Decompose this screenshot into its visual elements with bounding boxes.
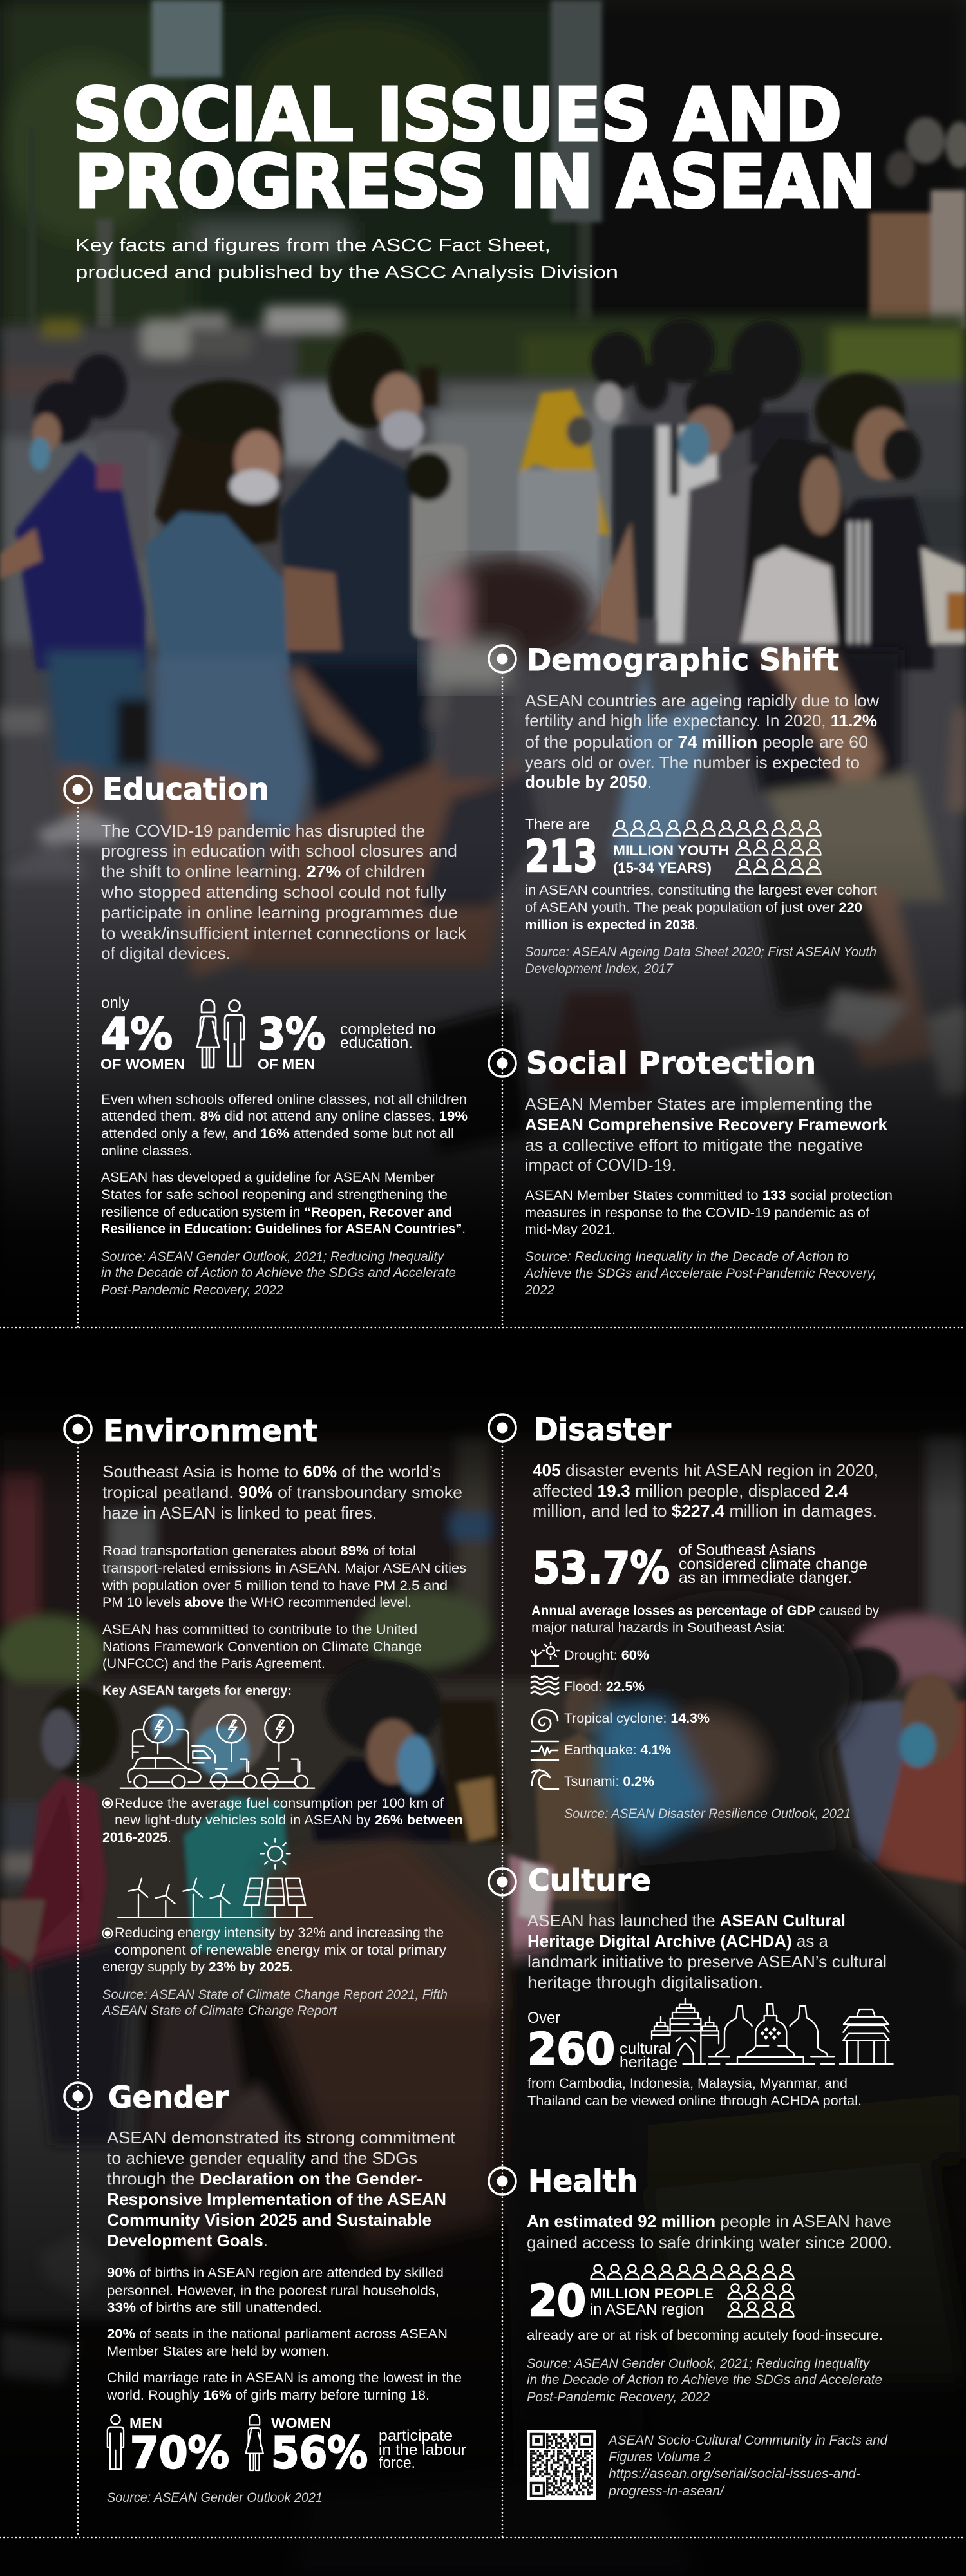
- bullet: fuel consumption: [102, 1795, 463, 1845]
- subheading: key targets: Key ASEAN targets for energy:: [102, 1683, 292, 1698]
- foreground blurred girl: [425, 557, 592, 689]
- statistic: labour force: participate: [379, 2427, 453, 2445]
- source: social protection: 2022: [524, 1283, 554, 1298]
- statistic: 53.7 percent: considered climate change: [679, 1555, 867, 1573]
- body text: ageing: fertility and high life expectancy. In 2020, 11.2%: [525, 711, 877, 730]
- icon: drought: [531, 1642, 559, 1666]
- body text: recovery framework: [525, 1094, 888, 1175]
- statistic: 213 million youth: (15-34 YEARS): [613, 860, 712, 876]
- body text: covid disruption: to weak/insufficient internet connections or lack: [101, 923, 467, 943]
- body text: road transport: PM 10 levels above the WHO recommended level.: [102, 1595, 412, 1610]
- statistic: 20 million people: [528, 2264, 793, 2327]
- source: health: in the Decade of Action to Achieve the SDGs and Accelerate: [527, 2372, 882, 2387]
- source: demographic: Development Index, 2017: [525, 961, 674, 976]
- section marker: disaster: [489, 1414, 516, 1441]
- source: environment: Source: ASEAN State of Climate Change Report 2021, Fifth: [102, 1987, 448, 2002]
- body text: disaster events: affected 19.3 million people, displaced 2.4: [533, 1481, 849, 1501]
- body text: gender declaration: [107, 2128, 456, 2250]
- statistic: labour force: in the labour: [379, 2441, 466, 2459]
- source: education: Source: ASEAN Gender Outlook, 2021; Reducing Inequality: [101, 1249, 444, 1264]
- body text: disaster events: [533, 1461, 878, 1520]
- section marker: environment: [64, 1416, 91, 1443]
- icon: renewable energy: [118, 1839, 312, 1917]
- statistic: labour force: 70%: [130, 2428, 229, 2479]
- source: health: [527, 2356, 882, 2405]
- statistic: completed no education: completed no: [340, 1021, 436, 1038]
- section marker: health: [489, 2168, 516, 2195]
- body text: ACHDA portal: [527, 2076, 862, 2108]
- body text: births: 33% of births are still unattended.: [107, 2300, 322, 2315]
- icon: heritage temples: [652, 1998, 893, 2064]
- label: drought: Drought: 60%: [564, 1647, 649, 1663]
- statistic: labour force: 56%: [271, 2428, 368, 2479]
- body text: covid disruption: The COVID-19 pandemic has disrupted the: [101, 821, 425, 840]
- statistic: 260 cultural heritage: 260: [527, 2024, 615, 2075]
- source: environment: [101, 1987, 448, 2018]
- title: [73, 73, 876, 224]
- body text: parliament: [107, 2326, 448, 2359]
- lower street: [0, 650, 966, 1153]
- statistic: labour force: WOMEN: [271, 2415, 331, 2431]
- body text: covid disruption: [100, 821, 467, 963]
- source: demographic: Source: ASEAN Ageing Data Sheet 2020; First ASEAN Youth: [525, 945, 876, 960]
- icon: earthquake: [531, 1741, 558, 1760]
- statistic: 53.7 percent: [533, 1541, 867, 1594]
- statistic: labour force: force.: [379, 2454, 415, 2472]
- body text: road transport: [102, 1543, 466, 1610]
- boy in white: [412, 444, 467, 638]
- body text: road transport: Road transportation generates about 89% of total: [102, 1543, 416, 1558]
- body text: gender declaration: through the Declaration on the Gender-: [107, 2169, 422, 2188]
- statistic: 260 cultural heritage: [527, 2009, 677, 2075]
- panel: demographic shift: [489, 643, 879, 976]
- body text: UNFCCC: ASEAN has committed to contribute to the United: [102, 1622, 417, 1637]
- body text: covid disruption: participate in online learning programmes due: [101, 903, 458, 922]
- label: tsunami: Tsunami: 0.2%: [564, 1774, 654, 1789]
- subtitle: Key facts and figures from the ASCC Fact Sheet,: [75, 235, 551, 255]
- bullet: energy intensity: Reducing energy intensity by 32% and increasing the: [115, 1925, 444, 1940]
- section marker: demographic shift: [489, 645, 516, 672]
- body text: food insecure: already are or at risk of becoming acutely food-insecure.: [527, 2327, 883, 2343]
- panel: disaster: [489, 1412, 879, 1821]
- statistic: completed no education: only: [101, 994, 129, 1012]
- body text: online classes: attended them. 8% did not attend any online classes, 19%: [101, 1108, 468, 1124]
- body text: road transport: with population over 5 million tend to have PM 2.5 and: [102, 1578, 448, 1593]
- body text: peatland: haze in ASEAN is linked to peat fires.: [102, 1503, 377, 1522]
- body text: ageing: [525, 691, 879, 791]
- body text: covid disruption: progress in education with school closures and: [101, 841, 457, 860]
- body text: recovery framework: ASEAN Member States are implementing the: [525, 1094, 873, 1113]
- body text: guideline: [101, 1170, 466, 1236]
- reference link: [607, 2433, 888, 2499]
- statistic: 213 million youth: MILLION YOUTH: [613, 842, 729, 858]
- source: health: Post-Pandemic Recovery, 2022: [527, 2390, 710, 2405]
- heading: disaster: Disaster: [534, 1412, 672, 1448]
- source: environment: ASEAN State of Climate Change Report: [101, 2003, 337, 2018]
- source: disaster: Source: ASEAN Disaster Resilience Outlook, 2021: [564, 1806, 851, 1821]
- body text: social protection measures: ASEAN Member States committed to 133 social protection: [525, 1188, 893, 1203]
- reference link: progress-in-asean/: [608, 2484, 725, 2499]
- body text: guideline: ASEAN has developed a guideline for ASEAN Member: [101, 1170, 435, 1185]
- background photo: street crowd: [0, 0, 966, 1328]
- statistic: 213 million youth: [525, 816, 820, 882]
- title: PROGRESS IN ASEAN: [75, 140, 876, 224]
- source: demographic: [525, 945, 876, 976]
- body text: peatland: Southeast Asia is home to 60% of the world’s: [102, 1462, 441, 1481]
- source: social protection: [524, 1249, 876, 1298]
- list: natural hazards: [531, 1642, 710, 1789]
- body text: child marriage: Child marriage rate in ASEAN is among the lowest in the: [107, 2370, 462, 2385]
- statistic: completed no education: OF MEN: [258, 1056, 315, 1072]
- body text: UNFCCC: Nations Framework Convention on Climate Change: [102, 1639, 422, 1654]
- heading: environment: Environment: [103, 1414, 317, 1449]
- label: flood: Flood: 22.5%: [564, 1679, 645, 1694]
- body text: ageing: ASEAN countries are ageing rapidly due to low: [525, 691, 879, 710]
- body text: births: 90% of births in ASEAN region are attended by skilled: [107, 2265, 444, 2280]
- body text: drinking water: An estimated 92 million people in ASEAN have: [527, 2211, 891, 2231]
- body text: gender declaration: Community Vision 2025 and Sustainable: [107, 2210, 431, 2230]
- statistic: 20 million people: in ASEAN region: [590, 2301, 704, 2318]
- body text: social protection measures: measures in response to the COVID-19 pandemic as of: [525, 1205, 869, 1220]
- far left men: [73, 354, 127, 419]
- body text: child marriage: world. Roughly 16% of girls marry before turning 18.: [106, 2387, 430, 2403]
- background photo: crowd with masks: [0, 1328, 966, 2576]
- bullet: fuel consumption: new light-duty vehicles sold in ASEAN by 26% between: [115, 1812, 463, 1828]
- icon: electric vehicles: [120, 1714, 314, 1788]
- label: tropical cyclone: Tropical cyclone: 14.3%: [564, 1710, 710, 1726]
- hijab woman: [518, 390, 609, 535]
- icon: tsunami: [532, 1770, 558, 1789]
- heading: demographic shift: Demographic Shift: [527, 643, 839, 678]
- body text: ACHDA portal: from Cambodia, Indonesia, Malaysia, Myanmar, and: [527, 2076, 848, 2091]
- body text: ACHDA: landmark initiative to preserve ASEAN’s cultural: [527, 1952, 887, 1971]
- body text: ACHDA: [527, 1911, 887, 1992]
- heading: social protection: Social Protection: [526, 1046, 816, 1081]
- body text: guideline: States for safe school reopening and strengthening the: [101, 1187, 448, 1202]
- body text: peatland: [102, 1462, 462, 1522]
- statistic: 53.7 percent: as an immediate danger.: [679, 1569, 852, 1587]
- bullet: energy intensity: component of renewable energy mix or total primary: [115, 1942, 446, 1958]
- statistic: completed no education: OF WOMEN: [100, 1056, 185, 1072]
- body text: covid disruption: of digital devices.: [101, 943, 231, 963]
- icon: woman: [246, 2414, 263, 2470]
- body text: parliament: Member States are held by women.: [107, 2344, 330, 2359]
- icon: flood: [531, 1676, 558, 1694]
- body text: disaster events: 405 disaster events hit ASEAN region in 2020,: [533, 1461, 878, 1480]
- statistic: 53.7 percent: of Southeast Asians: [679, 1541, 815, 1559]
- body text: UNFCCC: (UNFCCC) and the Paris Agreement.: [102, 1656, 325, 1671]
- body text: UNFCCC: [102, 1622, 422, 1671]
- body text: gender declaration: to achieve gender equality and the SDGs: [107, 2148, 417, 2168]
- body text: youth cohort: of ASEAN youth. The peak population of just over 220: [525, 900, 862, 915]
- source: education: [101, 1249, 456, 1298]
- statistic: labour force: [108, 2414, 466, 2479]
- panel: education: [64, 772, 468, 1298]
- body text: online classes: Even when schools offered online classes, not all children: [101, 1092, 467, 1107]
- body text: youth cohort: [525, 882, 877, 933]
- body text: peatland: tropical peatland. 90% of transboundary smoke: [102, 1482, 462, 1502]
- body text: drinking water: gained access to safe drinking water since 2000.: [527, 2233, 892, 2252]
- QR code: [527, 2430, 596, 2500]
- bullet: fuel consumption: Reduce the average fuel consumption per 100 km of: [115, 1795, 444, 1811]
- body text: road transport: transport-related emissions in ASEAN. Major ASEAN cities: [102, 1560, 466, 1576]
- body text: recovery framework: impact of COVID-19.: [525, 1155, 676, 1175]
- body text: ACHDA: heritage through digitalisation.: [527, 1973, 763, 1992]
- body text: gender declaration: ASEAN demonstrated its strong commitment: [107, 2128, 456, 2147]
- black mask man group: [591, 332, 645, 390]
- statistic: 213 million youth: 213: [525, 831, 598, 882]
- body text: online classes: attended only a few, and 16% attended some but not all: [101, 1126, 454, 1141]
- bullet: fuel consumption: 2016-2025.: [102, 1830, 171, 1845]
- body text: youth cohort: in ASEAN countries, constituting the largest ever cohort: [525, 882, 877, 898]
- panel: health: [489, 2164, 892, 2500]
- source: social protection: Source: Reducing Inequality in the Decade of Action to: [525, 1249, 849, 1264]
- body text: parliament: 20% of seats in the national parliament across ASEAN: [107, 2326, 448, 2342]
- long hair woman: [741, 438, 844, 644]
- bullet: energy intensity: energy supply by 23% by 2025.: [102, 1959, 293, 1975]
- source: education: Post-Pandemic Recovery, 2022: [101, 1283, 283, 1298]
- icon: youth people row: [613, 820, 820, 875]
- icon: man: [108, 2415, 124, 2469]
- body text: guideline: resilience of education system in “Reopen, Recover and: [101, 1204, 452, 1220]
- heading: gender: Gender: [108, 2080, 229, 2116]
- body text: guideline: Resilience in Education: Guidelines for ASEAN Countries”.: [101, 1221, 466, 1236]
- black tee man: [815, 496, 934, 670]
- icon: woman: [197, 999, 219, 1068]
- section marker: social protection: [489, 1050, 516, 1077]
- reference link: Figures Volume 2: [609, 2450, 711, 2465]
- woman blue dress: [155, 386, 283, 554]
- statistic: 260 cultural heritage: heritage: [620, 2054, 677, 2071]
- body text: ageing: of the population or 74 million people are 60: [525, 732, 868, 752]
- panel: gender: [64, 2080, 466, 2505]
- panel: culture: [489, 1863, 893, 2108]
- body text: annual losses: major natural hazards in Southeast Asia:: [531, 1620, 786, 1635]
- panel: environment: [64, 1414, 466, 2018]
- icon: man: [225, 1001, 244, 1066]
- body text: drinking water: [527, 2211, 892, 2252]
- body text: gender declaration: Development Goals.: [107, 2231, 268, 2250]
- body text: ACHDA portal: Thailand can be viewed online through ACHDA portal.: [527, 2093, 862, 2108]
- source: gender: Source: ASEAN Gender Outlook 2021: [107, 2490, 323, 2505]
- body text: social protection measures: [525, 1188, 893, 1237]
- reference link: ASEAN Socio-Cultural Community in Facts and: [607, 2433, 888, 2448]
- source: health: Source: ASEAN Gender Outlook, 2021; Reducing Inequality: [527, 2356, 870, 2371]
- body text: births: personnel. However, in the poorest rural households,: [107, 2283, 439, 2298]
- section marker: culture: [489, 1868, 516, 1895]
- statistic: labour force: MEN: [129, 2415, 162, 2431]
- bullet: energy intensity: [102, 1925, 446, 1975]
- body text: ACHDA: ASEAN has launched the ASEAN Cultural: [527, 1911, 846, 1930]
- body text: covid disruption: the shift to online learning. 27% of children: [101, 862, 425, 881]
- statistic: completed no education: 3%: [258, 1009, 325, 1060]
- statistic: 260 cultural heritage: Over: [527, 2009, 560, 2027]
- navy man: [419, 367, 438, 406]
- body text: online classes: online classes.: [101, 1143, 193, 1159]
- body text: ACHDA: Heritage Digital Archive (ACHDA) as a: [527, 1931, 829, 1951]
- statistic: 53.7 percent: 53.7%: [533, 1543, 670, 1594]
- statistic: 20 million people: MILLION PEOPLE: [590, 2286, 714, 2302]
- heading: education: Education: [102, 772, 269, 808]
- body text: covid disruption: who stopped attending school could not fully: [100, 882, 446, 902]
- icon: tropical cyclone: [532, 1710, 558, 1731]
- body text: online classes: [101, 1092, 468, 1159]
- heading: culture: Culture: [528, 1863, 651, 1899]
- subtitle: [75, 235, 618, 282]
- title: SOCIAL ISSUES AND: [73, 73, 842, 157]
- body text: recovery framework: as a collective effort to mitigate the negative: [525, 1135, 863, 1155]
- panel: social protection: [489, 1046, 893, 1298]
- statistic: 260 cultural heritage: cultural: [620, 2040, 671, 2058]
- section marker: gender: [64, 2083, 91, 2110]
- label: earthquake: Earthquake: 4.1%: [564, 1742, 671, 1757]
- body text: disaster events: million, and led to $227.4 million in damages.: [533, 1501, 877, 1520]
- body text: gender declaration: Responsive Implementation of the ASEAN: [107, 2190, 446, 2209]
- body text: youth cohort: million is expected in 2038.: [525, 917, 699, 933]
- section marker: education: [64, 776, 91, 803]
- statistic: completed no education: education.: [340, 1034, 413, 1052]
- body text: child marriage: [106, 2370, 462, 2403]
- body text: annual losses: [531, 1603, 879, 1635]
- body text: ageing: years old or over. The number is expected to: [525, 753, 860, 772]
- body text: recovery framework: ASEAN Comprehensive Recovery Framework: [525, 1115, 888, 1134]
- source: education: in the Decade of Action to Achieve the SDGs and Accelerate: [101, 1265, 456, 1280]
- reference link: https://asean.org/serial/social-issues-and-: [609, 2467, 860, 2481]
- statistic: completed no education: [100, 994, 436, 1072]
- subtitle: produced and published by the ASCC Analysis Division: [75, 262, 618, 282]
- statistic: 20 million people: 20: [528, 2276, 586, 2327]
- body text: births: [107, 2265, 444, 2315]
- body text: annual losses: Annual average losses as percentage of GDP caused by: [531, 1603, 879, 1618]
- statistic: 213 million youth: There are: [525, 816, 590, 833]
- icon: food-insecure people: [591, 2264, 793, 2317]
- statistic: completed no education: 4%: [101, 1009, 173, 1060]
- body text: social protection measures: mid-May 2021.: [525, 1222, 616, 1237]
- heading: health: Health: [528, 2164, 638, 2199]
- source: social protection: Achieve the SDGs and Accelerate Post-Pandemic Recovery,: [524, 1266, 876, 1281]
- timeline dotted lines: [0, 674, 966, 2537]
- body text: ageing: double by 2050.: [525, 772, 652, 791]
- white bag: [921, 547, 966, 644]
